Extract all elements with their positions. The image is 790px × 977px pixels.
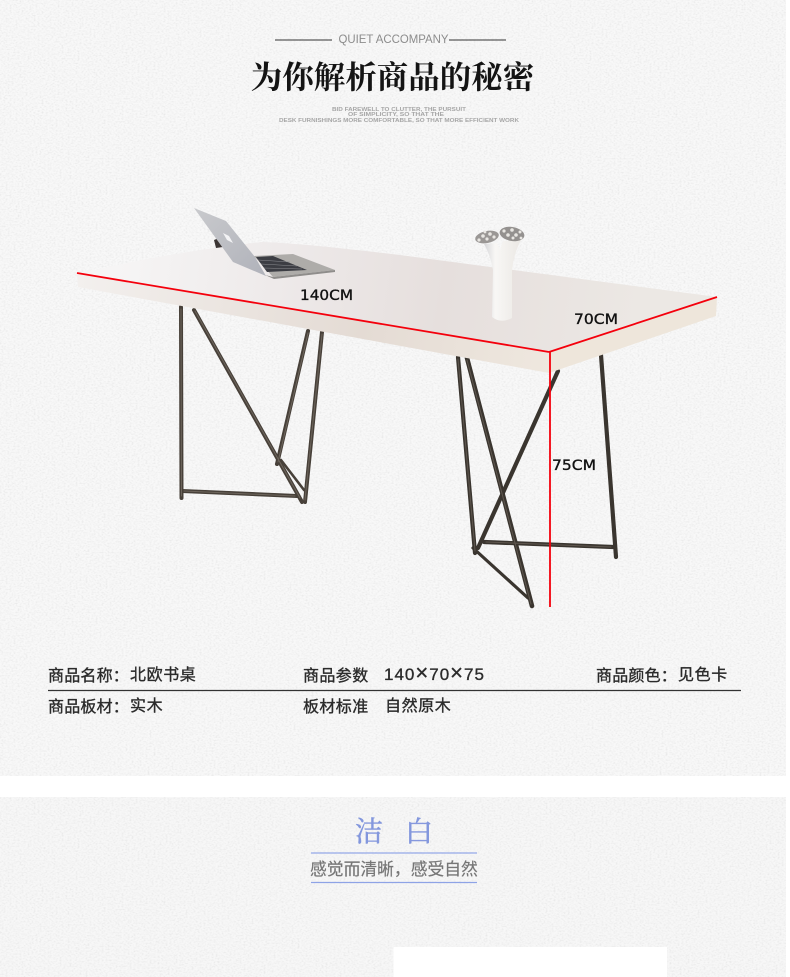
subheading rule top <box>311 852 477 854</box>
spec table: 商品颜色： <box>596 667 677 685</box>
fine print: BID FAREWELL TO CLUTTER, THE PURSUIT <box>332 107 466 113</box>
table legs: left <box>181 307 322 502</box>
white image placeholder <box>394 947 667 977</box>
panel: clean white background <box>0 797 786 977</box>
title: 为你解析商品的秘密 <box>251 60 536 95</box>
spec table: 商品板材： <box>48 698 129 716</box>
spec table: 自然原木 <box>385 697 451 715</box>
table top <box>77 242 717 373</box>
spec table: 商品参数 <box>303 667 369 685</box>
heading: 洁白: 白 <box>405 816 433 848</box>
spec table: 商品名称： <box>48 667 129 685</box>
panel: dimensions background <box>0 0 786 776</box>
fine print: OF SIMPLICITY, SO THAT THE <box>348 112 445 118</box>
table legs: right <box>458 355 616 606</box>
spec table: 板材标准 <box>303 698 369 716</box>
icon: laptop <box>194 208 335 279</box>
spec table <box>48 660 741 716</box>
dimension lines <box>77 273 717 607</box>
spec table: 北欧书桌 <box>130 666 196 684</box>
heading: 洁白: 洁 <box>355 816 383 848</box>
icon: white vase with flowers <box>474 225 526 321</box>
subheading text: 感觉而清晰，感受自然 <box>310 860 478 879</box>
spec table: 实木 <box>130 697 163 715</box>
spec table: 140×70×75 <box>384 660 485 685</box>
spec table: 见色卡 <box>678 666 728 684</box>
label: 140CM: 140CM <box>300 288 353 304</box>
overline: QUIET ACCOMPANY: QUIET ACCOMPANY <box>338 34 449 46</box>
heading: 洁白 <box>355 816 433 848</box>
label: 70CM: 70CM <box>574 312 618 328</box>
fine print: DESK FURNISHINGS MORE COMFORTABLE, SO THAT MORE EFFICIENT WORK <box>279 118 519 124</box>
fine print <box>279 107 519 124</box>
subheading rule bottom <box>311 882 477 884</box>
label: 75CM: 75CM <box>552 458 596 474</box>
